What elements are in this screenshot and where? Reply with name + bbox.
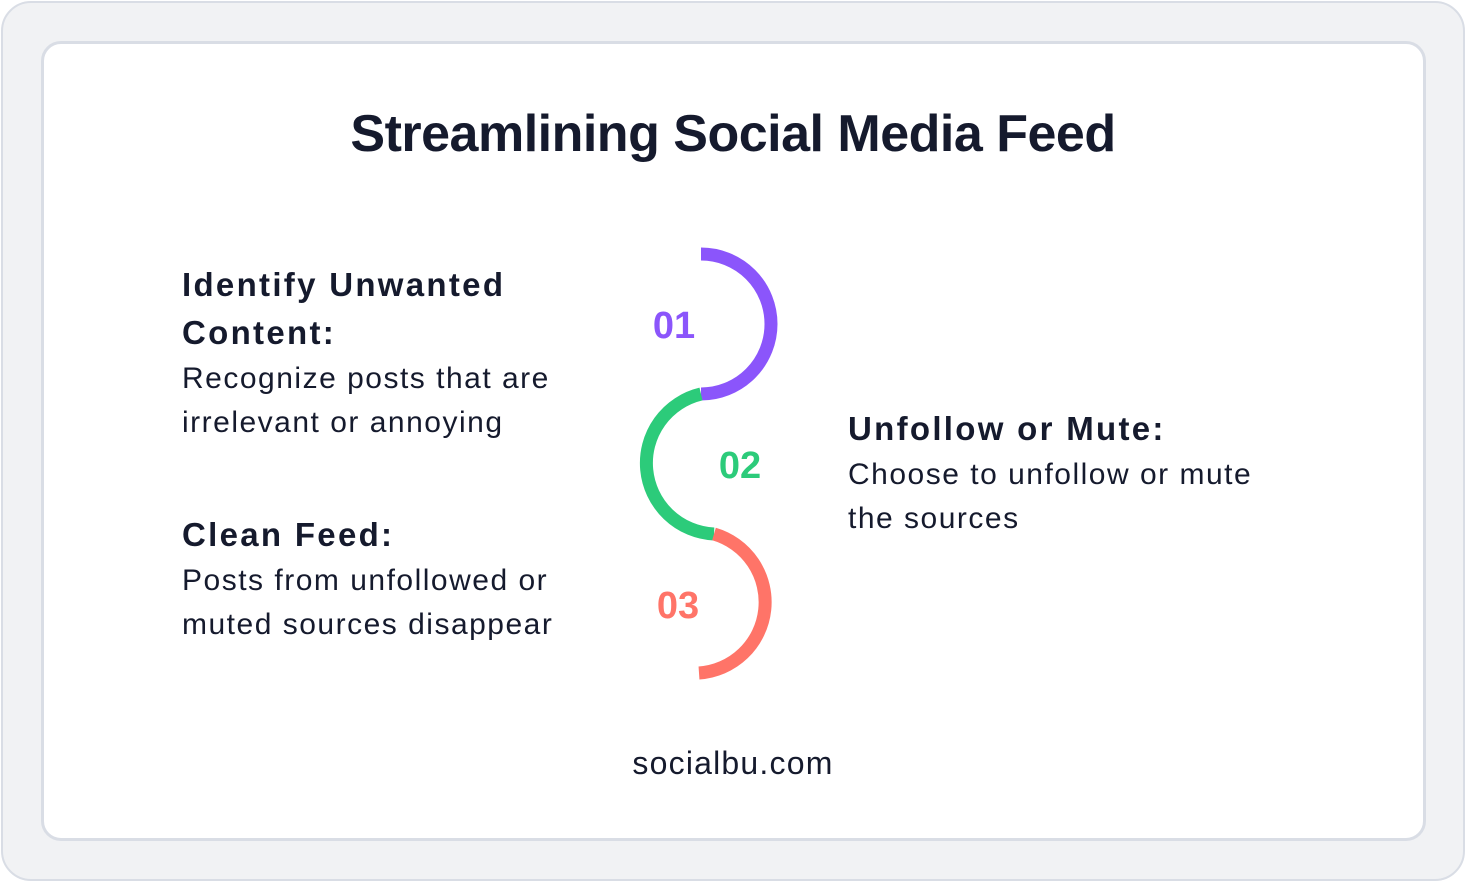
title: Streamlining Social Media Feed	[350, 105, 1116, 163]
arc 02: 02	[719, 445, 761, 487]
text: step 1: Identify Unwanted Content:	[182, 266, 505, 351]
text: step 3: Clean Feed:	[182, 516, 394, 553]
text: step 2	[848, 410, 1252, 535]
arc 01	[653, 254, 771, 394]
text: step 2: Unfollow or Mute:	[848, 410, 1166, 447]
text: step 1: Recognize posts that are irrelevant or annoying	[182, 362, 550, 439]
text: step 3: Posts from unfollowed or muted sources disappear	[182, 564, 553, 641]
footer: socialbu.com	[632, 745, 834, 781]
arc 03: 03	[657, 585, 699, 627]
text: step 2: Choose to unfollow or mute the sources	[848, 458, 1252, 535]
text: step 3	[182, 516, 553, 641]
arc 01: 01	[653, 305, 695, 347]
arc 03	[657, 534, 765, 673]
arc 02	[646, 394, 761, 534]
text: step 1	[182, 266, 550, 439]
